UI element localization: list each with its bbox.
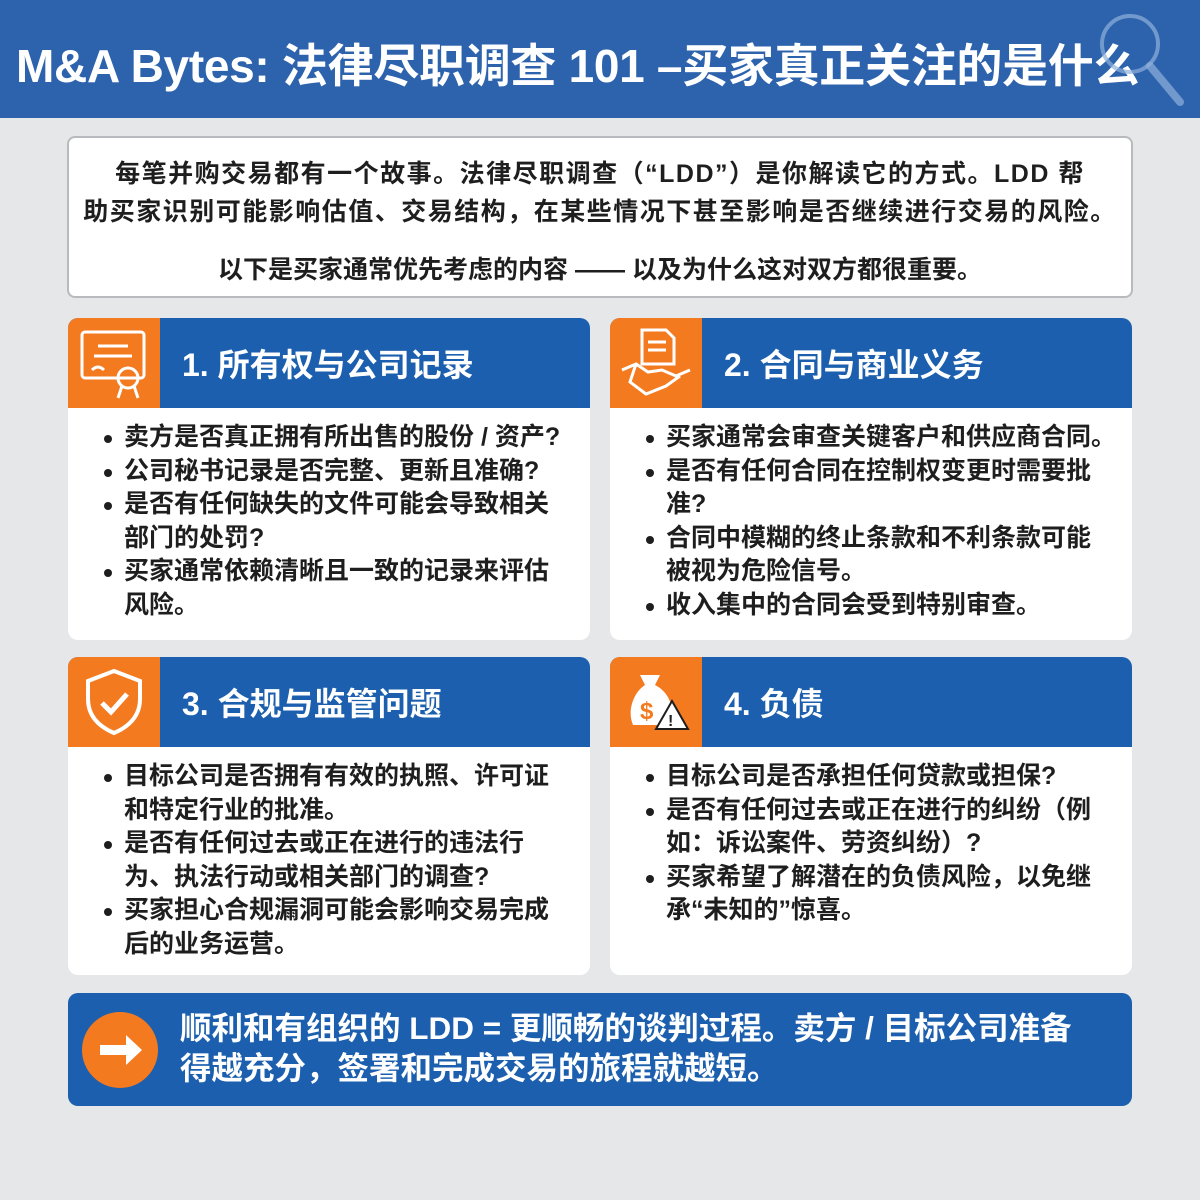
bullets: 买家希望了解潜在的负债风险，以免继 (666, 862, 1091, 890)
heading: 2. 合同与商业义务 (724, 347, 984, 383)
bullets: 买家担心合规漏洞可能会影响交易完成 (124, 896, 549, 924)
panel: compliance (68, 657, 590, 975)
heading: 1. 所有权与公司记录 (182, 347, 474, 383)
bullets (646, 762, 1091, 924)
intro text box (67, 136, 1133, 298)
bullets: 是否有任何缺失的文件可能会导致相关 (124, 490, 549, 518)
bullets: 是否有任何合同在控制权变更时需要批 (666, 456, 1091, 484)
icon: shield check (68, 657, 160, 747)
bullets: 合同中模糊的终止条款和不利条款可能 (666, 524, 1091, 552)
intro text box: 以下是买家通常优先考虑的内容 —— 以及为什么这对双方都很重要。 (218, 256, 982, 284)
conclusion text: 顺利和有组织的 LDD = 更顺畅的谈判过程。卖方 / 目标公司准备 (180, 1010, 1072, 1046)
icon: money bag warning: ! (668, 713, 673, 730)
icon: handshake document (610, 318, 702, 408)
icon: arrow (82, 1012, 158, 1088)
bullets: 为、执法行动或相关部门的调查? (124, 862, 489, 890)
bullets: 被视为危险信号。 (666, 557, 866, 585)
icon: money bag warning: $ (640, 698, 654, 725)
icon: money bag warning (610, 657, 702, 747)
bullets: 收入集中的合同会受到特别审查。 (666, 590, 1041, 618)
bullets: 后的业务运营。 (124, 930, 299, 958)
bullets: 买家通常依赖清晰且一致的记录来评估 (124, 557, 549, 585)
intro text box: 助买家识别可能影响估值、交易结构，在某些情况下甚至影响是否继续进行交易的风险。 (83, 198, 1117, 226)
bullets: 是否有任何过去或正在进行的违法行 (124, 829, 524, 857)
bullets: 风险。 (124, 590, 199, 618)
bullets: 公司秘书记录是否完整、更新且准确? (124, 456, 539, 484)
bullets: 是否有任何过去或正在进行的纠纷（例 (666, 796, 1091, 824)
panel: contracts (610, 318, 1132, 640)
bullets: 卖方是否真正拥有所出售的股份 / 资产? (124, 423, 560, 451)
bullets (104, 423, 560, 618)
bullets: 部门的处罚? (124, 524, 264, 552)
heading: 3. 合规与监管问题 (182, 686, 442, 722)
bullets: 和特定行业的批准。 (124, 796, 349, 824)
bullets: 买家通常会审查关键客户和供应商合同。 (666, 423, 1116, 451)
bullets: 承“未知的”惊喜。 (666, 896, 866, 924)
title: M&A Bytes: 法律尽职调查 101 –买家真正关注的是什么 (16, 40, 1139, 92)
conclusion text (180, 1010, 1072, 1086)
heading: 4. 负债 (724, 686, 824, 722)
bullets: 如：诉讼案件、劳资纠纷）? (666, 829, 981, 857)
bullets (104, 762, 549, 958)
bullets: 准? (666, 490, 706, 518)
panel: ownership (68, 318, 590, 640)
intro text box: 每笔并购交易都有一个故事。法律尽职调查（“LDD”）是你解读它的方式。LDD 帮 (115, 160, 1085, 188)
bullets: 目标公司是否承担任何贷款或担保? (666, 762, 1056, 790)
panel: liabilities (610, 657, 1132, 975)
icon: magnifier (1100, 14, 1184, 106)
banner: conclusion (68, 993, 1132, 1106)
bullets (646, 423, 1116, 618)
conclusion text: 得越充分，签署和完成交易的旅程就越短。 (180, 1050, 779, 1086)
header bar (0, 0, 1200, 118)
icon: certificate (68, 318, 160, 408)
bullets: 目标公司是否拥有有效的执照、许可证 (124, 762, 549, 790)
